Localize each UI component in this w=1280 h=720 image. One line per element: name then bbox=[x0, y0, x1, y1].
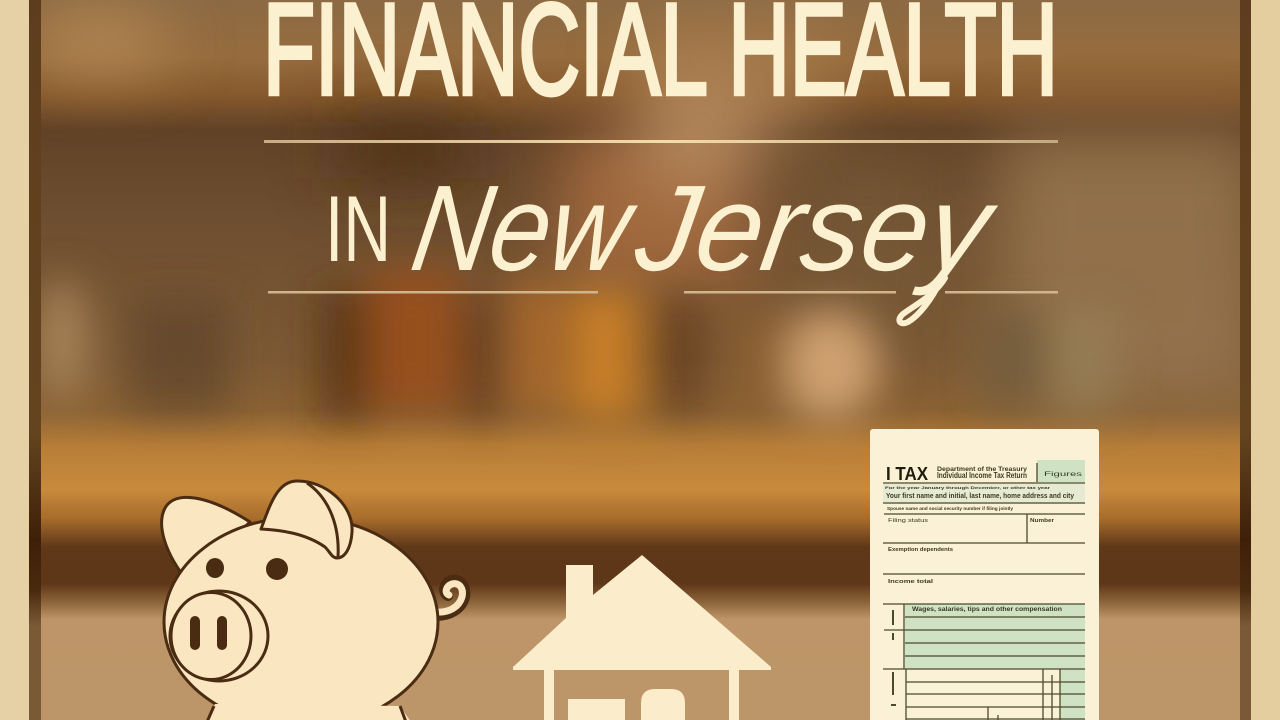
form small print: Your first name and initial, last name, home address and city bbox=[886, 493, 1074, 500]
pig body bbox=[164, 517, 438, 720]
form small print: Number bbox=[1030, 518, 1054, 524]
frame: right border bbox=[1240, 0, 1280, 720]
form heading: I TAX bbox=[886, 464, 928, 484]
form small print: Figures bbox=[1044, 472, 1082, 478]
house window bbox=[568, 699, 625, 720]
pig nostrils bbox=[190, 616, 200, 650]
form small print: Wages, salaries, tips and other compensation bbox=[912, 607, 1062, 613]
form paper bbox=[870, 429, 1099, 720]
pig eyes bbox=[206, 558, 224, 578]
form small print: Income total bbox=[888, 579, 934, 585]
script word: New: New bbox=[404, 161, 646, 297]
pig legs bbox=[207, 704, 411, 720]
pig tail bbox=[436, 580, 465, 616]
form small print: Filing status bbox=[888, 518, 929, 524]
script flourish under y bbox=[899, 278, 945, 323]
top divider rule bbox=[264, 140, 1058, 143]
form small print: Exemption dependents bbox=[888, 547, 953, 553]
icon: tax form document bbox=[870, 429, 1099, 720]
pig left ear bbox=[162, 497, 250, 574]
house door bbox=[641, 689, 685, 720]
icon: piggy bank bbox=[162, 481, 465, 720]
pig snout bbox=[170, 591, 268, 681]
script word: Jersey: Jersey bbox=[627, 161, 1006, 297]
pig right ear bbox=[261, 481, 352, 558]
icon: house bbox=[513, 555, 771, 720]
lower divider rule bbox=[268, 291, 1058, 294]
word: IN: IN bbox=[325, 176, 391, 281]
form small print: Department of the Treasury bbox=[937, 467, 1028, 473]
form small print: Spouse name and social security number if filing jointly bbox=[887, 506, 1014, 511]
form rule lines bbox=[883, 463, 1085, 720]
house posts bbox=[544, 668, 554, 720]
pig ear fold bbox=[307, 483, 338, 557]
form small print: For the year January through December, or other tax year bbox=[885, 485, 1051, 490]
subtitle: In New Jersey bbox=[325, 161, 1006, 323]
house roof and chimney bbox=[513, 555, 771, 670]
form small print: Individual Income Tax Return bbox=[937, 471, 1027, 480]
form margin marks bbox=[891, 610, 896, 705]
frame: left border bbox=[0, 0, 41, 720]
form green shading bbox=[883, 460, 1085, 720]
pig leg outlines bbox=[207, 706, 406, 720]
form small print bbox=[885, 467, 1082, 613]
